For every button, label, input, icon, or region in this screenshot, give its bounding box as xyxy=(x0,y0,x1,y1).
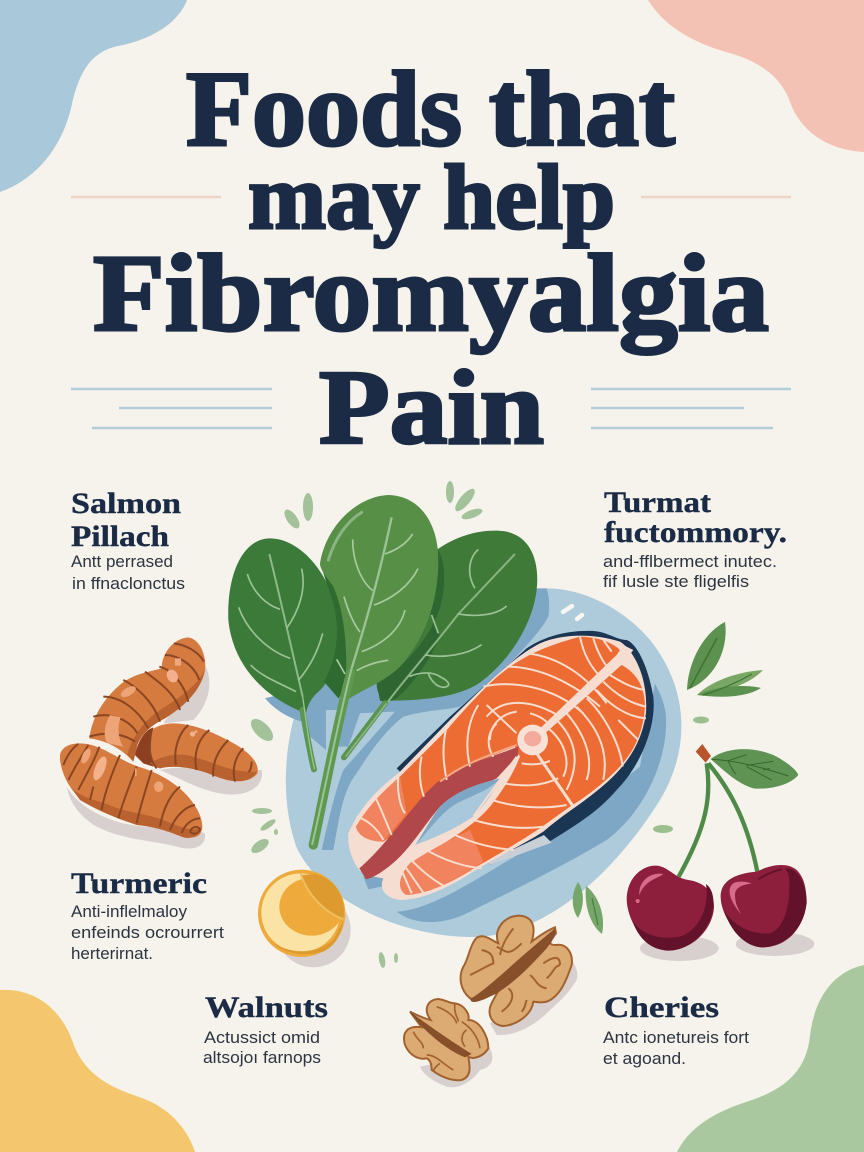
right root xyxy=(135,723,258,782)
text: turmeric xyxy=(71,867,224,963)
text: turmeric: Anti-inflelmaloy xyxy=(71,903,188,921)
spinach left leaf xyxy=(228,538,340,769)
salmon flesh xyxy=(348,636,646,900)
text: walnuts: Actussict omid xyxy=(204,1029,320,1047)
text: turmat fuctommory: fuctommory. xyxy=(604,516,787,549)
icon: spinach leaves xyxy=(228,495,537,845)
text: cherries: Cheries xyxy=(604,991,719,1024)
text: salmon pillach: Pillach xyxy=(71,520,169,553)
text: turmat fuctommory xyxy=(603,486,787,591)
title: Fibromyalgia xyxy=(93,232,769,354)
corner blob: yellow bottom left xyxy=(0,990,195,1152)
icon: side leaves xyxy=(573,622,763,934)
text: turmeric: Turmeric xyxy=(71,867,207,900)
icon: cherries xyxy=(627,744,814,961)
icon: oil capsule xyxy=(258,870,351,967)
text: walnuts: altsojoı farnops xyxy=(203,1049,321,1067)
spinach centre leaf xyxy=(312,495,438,845)
salmon orange flesh xyxy=(356,637,645,895)
text: salmon pillach: Salmon xyxy=(71,487,181,520)
text: walnuts xyxy=(203,991,328,1067)
text: cherries xyxy=(603,991,749,1068)
title: Pain xyxy=(319,349,544,466)
blue plate xyxy=(265,588,681,937)
text: turmeric: enfeinds ocrourrert xyxy=(71,924,224,942)
cherry shadows xyxy=(640,936,719,961)
small leaf sprigs xyxy=(247,481,709,968)
text: turmat fuctommory: fif lusle ste fligelfis xyxy=(603,573,749,591)
corner blob: pink top right xyxy=(648,0,864,152)
back root xyxy=(89,637,205,762)
icon: salmon steak xyxy=(348,631,654,900)
corner blob: blue top left xyxy=(0,0,187,192)
left cherry xyxy=(627,866,714,951)
text: turmat fuctommory: Turmat xyxy=(604,486,711,519)
small walnut xyxy=(404,999,488,1080)
right cherry xyxy=(721,865,807,947)
salmon inner gap xyxy=(415,778,500,845)
title xyxy=(93,51,769,466)
title: Foods that xyxy=(186,51,675,169)
cherry leaf xyxy=(711,749,798,789)
icon: turmeric roots xyxy=(60,637,262,849)
walnut shadows xyxy=(490,943,577,1035)
text: turmeric: herterirnat. xyxy=(71,945,153,963)
text: cherries: Antc ionetureis fort xyxy=(603,1029,749,1047)
text: turmat fuctommory: and-fflbermect inutec. xyxy=(603,553,777,571)
text: salmon pillach: in ffnaclonctus xyxy=(72,575,185,593)
text: salmon pillach: Antt perrased xyxy=(71,553,173,571)
salmon dark strip xyxy=(359,747,518,879)
cherry stems xyxy=(679,763,757,877)
title: may help xyxy=(248,146,615,248)
corner blob: green bottom right xyxy=(677,965,864,1152)
front root xyxy=(60,743,202,838)
spinach right leaf xyxy=(344,531,537,757)
text: walnuts: Walnuts xyxy=(205,991,328,1024)
icon: walnuts xyxy=(404,916,577,1087)
salmon muscle lines xyxy=(357,637,646,893)
turmeric shadows xyxy=(67,665,262,849)
salmon skin xyxy=(397,631,654,865)
text: salmon pillach xyxy=(71,487,185,593)
large walnut xyxy=(461,916,572,1026)
text: cherries: et agoand. xyxy=(603,1050,686,1068)
salmon spine xyxy=(517,725,548,755)
